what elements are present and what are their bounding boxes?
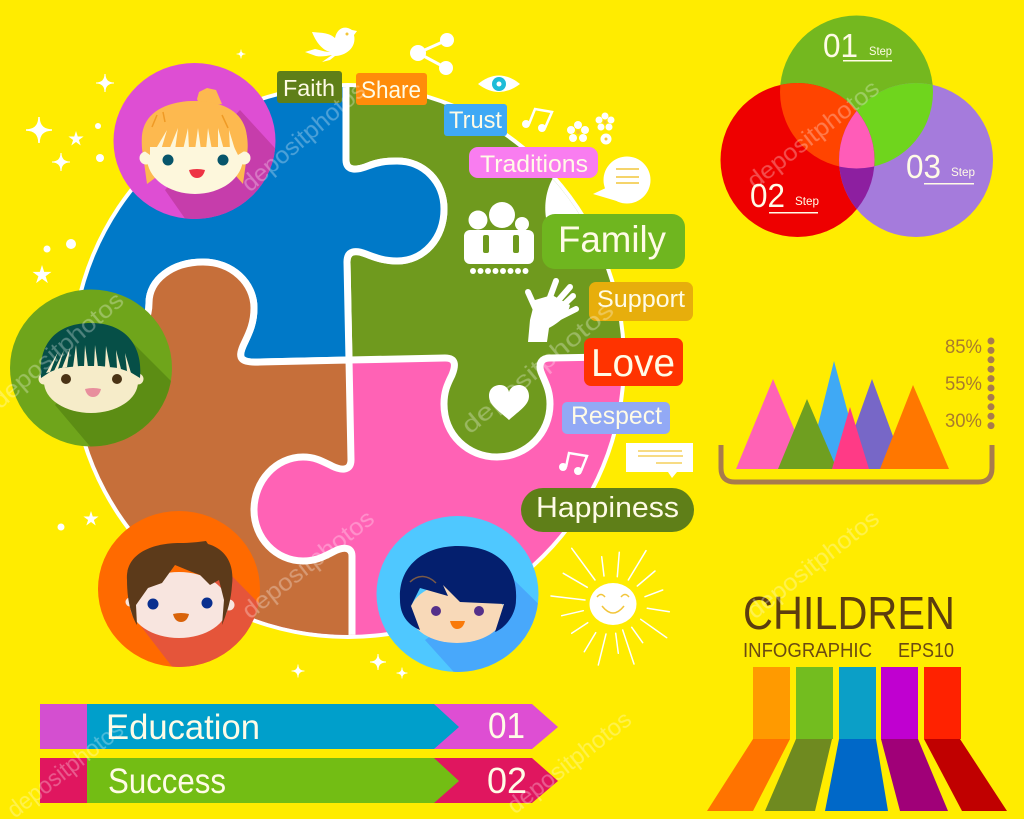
banner: Success: Success	[108, 762, 226, 801]
puzzle piece: brown	[88, 258, 356, 635]
tray	[721, 445, 992, 482]
watermarks: depositphotos	[502, 706, 637, 819]
puzzle icons	[464, 202, 693, 665]
keyword labels	[277, 71, 694, 532]
label: Family: Family	[558, 219, 666, 260]
icon: sun	[551, 548, 669, 665]
step 02 label: Step	[795, 194, 819, 208]
overlap: red and purple	[839, 110, 874, 210]
puzzle piece: pink	[254, 360, 621, 635]
percent labels	[945, 337, 982, 432]
label: Trust: Trust	[449, 107, 502, 134]
overlap: green and red	[780, 83, 874, 166]
triangles	[736, 361, 949, 469]
avatar: dark haired child	[10, 290, 172, 446]
top icons and sparkles	[26, 28, 650, 678]
banner: Education: 01	[488, 705, 525, 746]
circle: step 03	[839, 83, 993, 237]
colored columns	[707, 667, 1007, 811]
banner: Success: 02	[487, 760, 527, 801]
circle: step 02	[720, 83, 874, 237]
dotted scale	[988, 338, 994, 429]
icon: eye	[478, 76, 520, 92]
overlap: green and purple	[856, 83, 933, 166]
label: Support: Support	[597, 286, 685, 313]
circle: step 01	[780, 16, 933, 168]
banner: Education	[40, 704, 558, 749]
title block	[743, 587, 955, 662]
percent labels: 55%	[945, 374, 982, 395]
puzzle piece: blue	[84, 87, 448, 359]
watermarks: depositphotos	[742, 75, 885, 195]
label: Support	[589, 282, 693, 321]
label: Family	[542, 214, 685, 269]
icon: family	[464, 202, 534, 274]
watermarks	[0, 75, 885, 819]
icon: hand	[528, 281, 576, 342]
watermarks: depositphotos	[236, 77, 371, 198]
label: Respect: Respect	[571, 402, 662, 430]
puzzle piece: green	[350, 87, 621, 460]
step 01 label	[823, 27, 892, 64]
step 01 label: 01	[823, 27, 858, 64]
label: Love: Love	[591, 342, 675, 385]
percent labels: 30%	[945, 411, 982, 432]
step 03 label: 03	[906, 148, 941, 185]
icon: bird	[305, 28, 357, 62]
watermarks: depositphotos	[742, 505, 885, 625]
step 02 label	[750, 177, 819, 214]
icon: music notes	[559, 453, 587, 475]
step 03 label	[906, 148, 975, 185]
subtitle: INFOGRAPHIC	[743, 640, 872, 662]
white wedge	[545, 179, 579, 218]
subtitle: EPS10	[898, 640, 954, 662]
percent labels: 85%	[945, 337, 982, 358]
step 01 label: Step	[869, 44, 892, 58]
icon: share	[410, 33, 454, 75]
avatar: navy haired child	[376, 516, 538, 672]
label: Faith	[277, 71, 342, 103]
step 03 label: Step	[951, 165, 975, 179]
avatar: blonde child	[114, 63, 276, 219]
label: Traditions: Traditions	[480, 151, 588, 178]
icon: chat box	[626, 443, 693, 478]
subtitle	[743, 640, 954, 662]
title: CHILDREN	[743, 587, 955, 639]
banner: Education: Education	[106, 708, 260, 747]
step 02 label: 02	[750, 177, 785, 214]
triangle chart	[721, 337, 994, 482]
icon: heart	[489, 385, 529, 420]
icon: flowers	[567, 112, 614, 144]
sparkles	[26, 50, 408, 678]
label: Share: Share	[361, 77, 421, 104]
icon: speech bubble	[593, 156, 650, 204]
watermarks: depositphotos	[457, 297, 619, 440]
overlap: centre	[839, 110, 874, 168]
avatar: brown haired child	[98, 511, 260, 667]
label: Faith: Faith	[283, 75, 335, 101]
banner: Success	[40, 758, 558, 803]
icon: music notes	[522, 109, 552, 132]
label: Happiness	[521, 488, 694, 532]
label: Happiness: Happiness	[536, 492, 679, 524]
watermarks: depositphotos	[237, 505, 380, 625]
venn diagram	[720, 16, 993, 237]
puzzle circle	[79, 83, 625, 639]
